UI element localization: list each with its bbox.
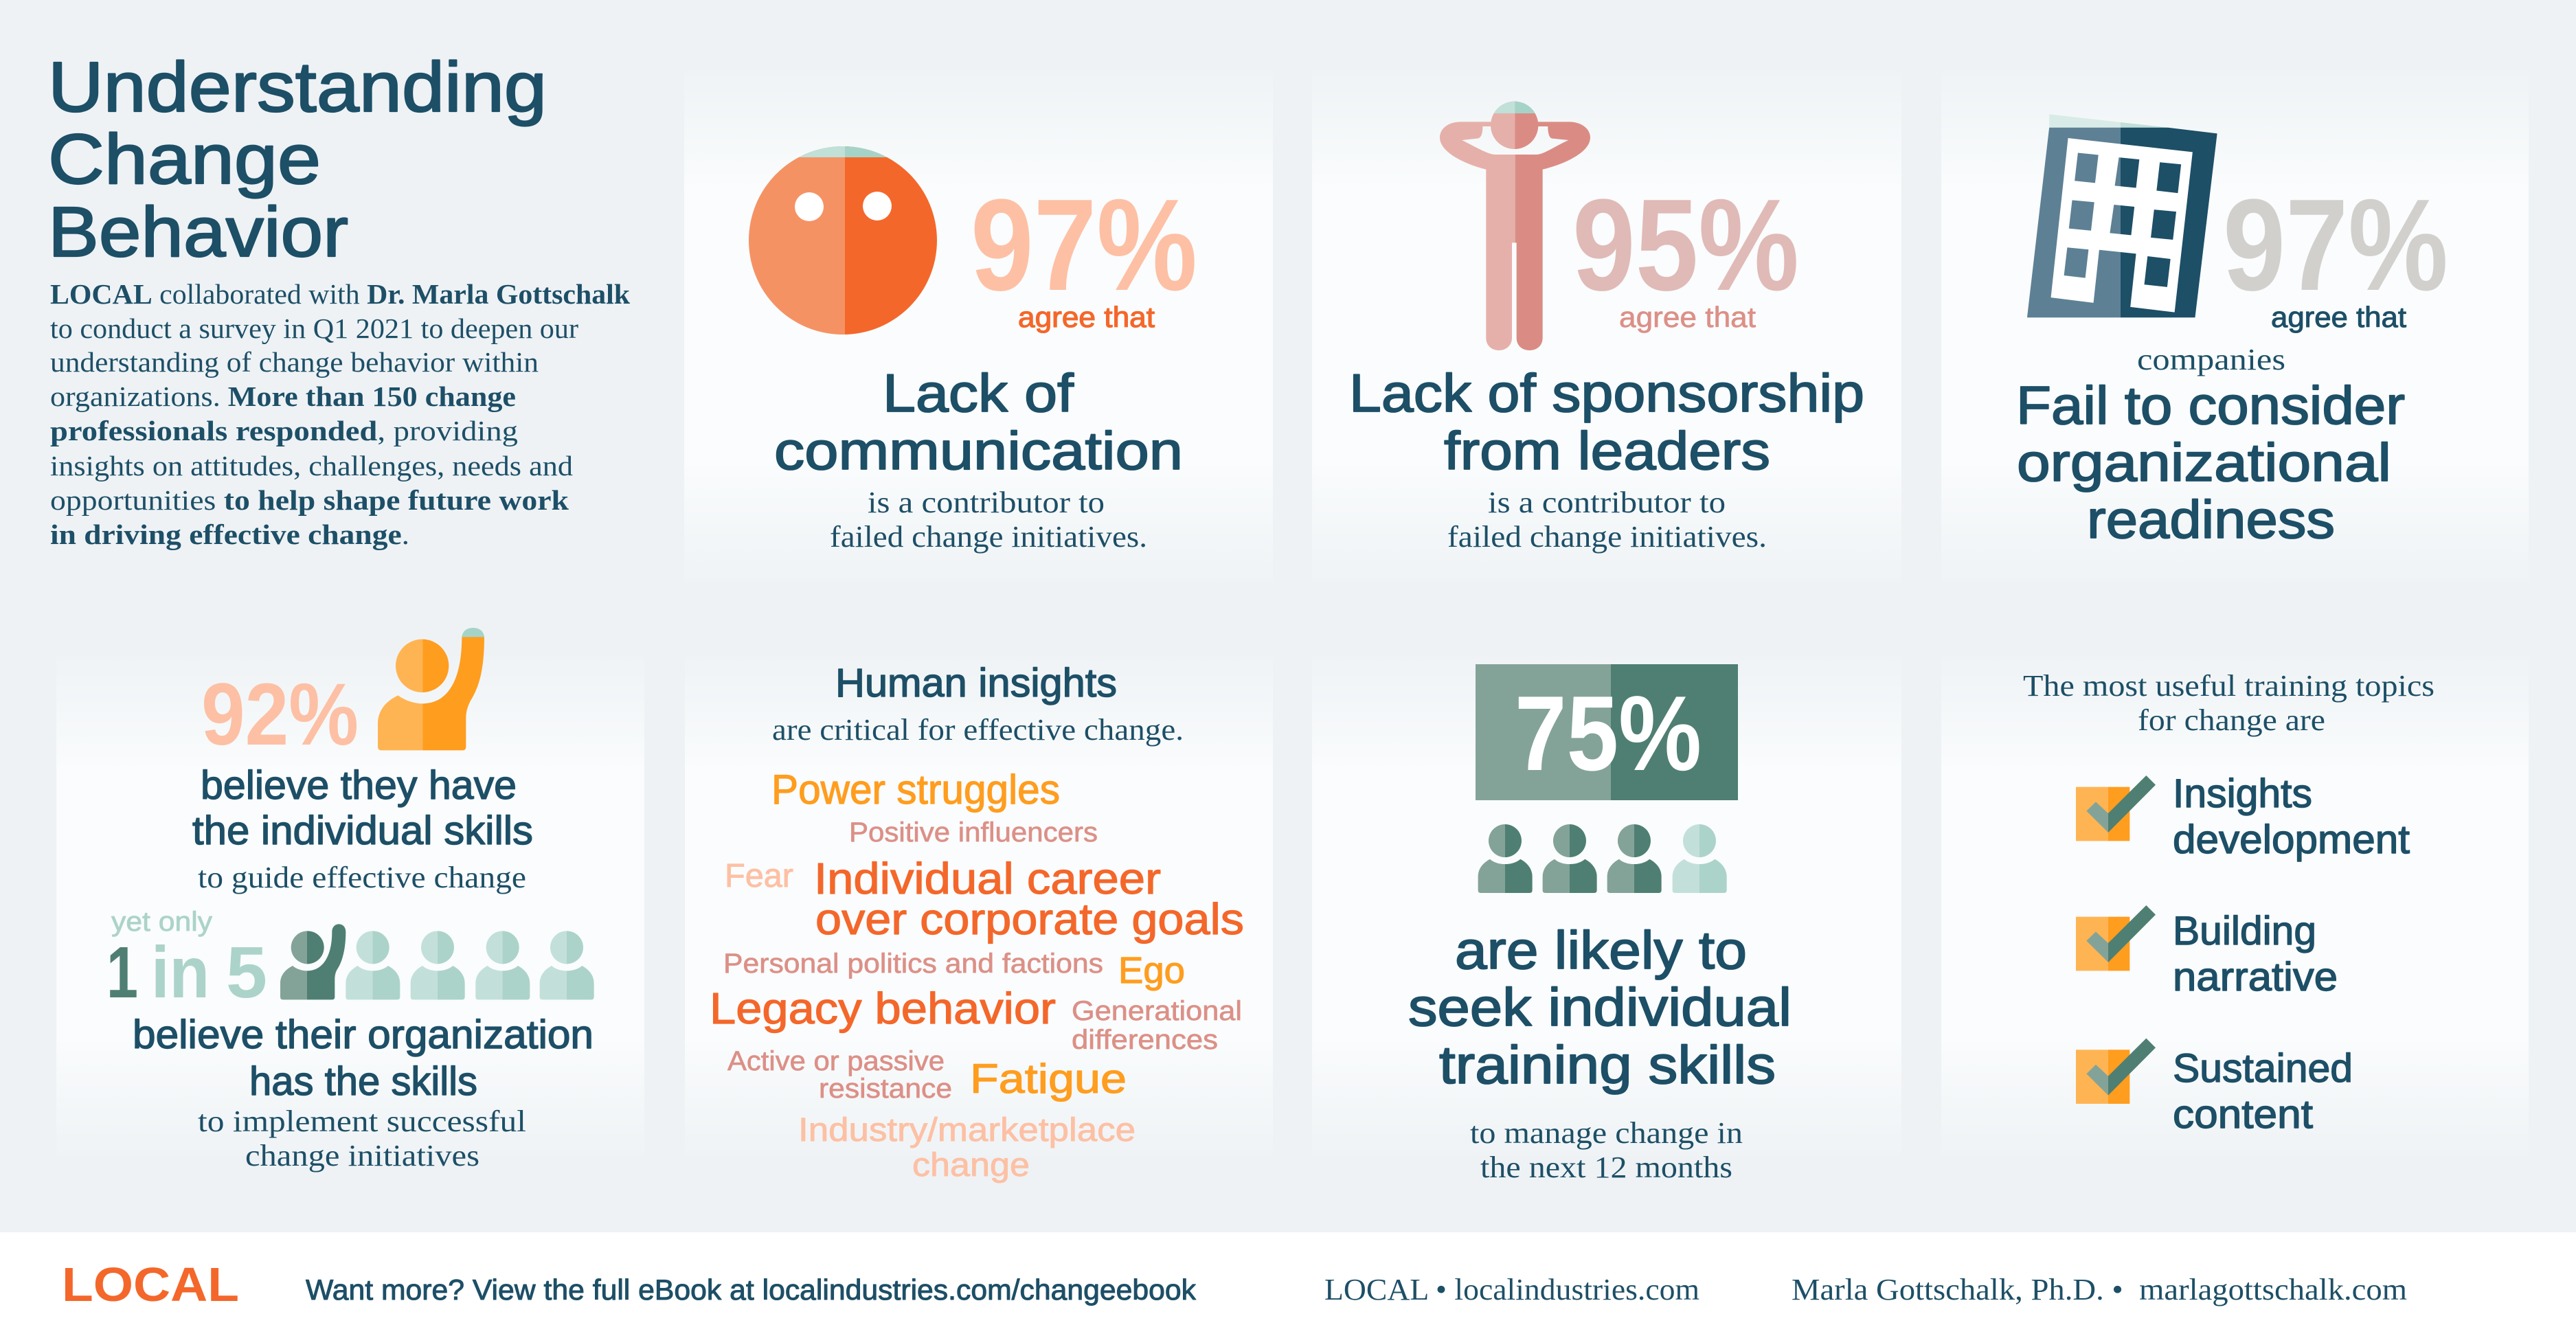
topic 2 bbox=[2173, 909, 2338, 999]
title: Behavior bbox=[48, 192, 348, 271]
icon: person with hands behind head bbox=[1440, 102, 1590, 350]
word cloud: Industry/marketplace bbox=[798, 1112, 1136, 1148]
icon: four people bbox=[1478, 824, 1727, 893]
stat: 95%: 95% bbox=[1572, 172, 1799, 318]
panel background bbox=[684, 71, 1273, 583]
topic 2: Building bbox=[2173, 909, 2316, 953]
panel: individual skills bbox=[56, 628, 644, 1173]
word cloud: Power struggles bbox=[771, 767, 1060, 813]
topic 3: Sustained bbox=[2173, 1046, 2353, 1091]
heading: Lack of sponsorship bbox=[1349, 363, 1864, 423]
intro text block: organizations. More than 150 change bbox=[50, 381, 516, 412]
word cloud: Fear bbox=[725, 858, 793, 894]
topic 1: development bbox=[2173, 817, 2410, 862]
title bbox=[48, 47, 547, 271]
caption bbox=[198, 1105, 526, 1173]
panel: lack of sponsorship bbox=[1312, 71, 1901, 583]
panel background bbox=[1941, 71, 2529, 583]
panel background bbox=[685, 656, 1273, 1156]
author link: Marla Gottschalk, Ph.D. • marlagottschalk.com bbox=[1792, 1273, 2407, 1306]
intro: for change are bbox=[2138, 703, 2325, 737]
panel: individual training bbox=[1312, 656, 1901, 1184]
word cloud: resistance bbox=[819, 1074, 952, 1104]
icon: person raising hand bbox=[378, 628, 484, 750]
stat: 1 in 5: 1 bbox=[106, 932, 138, 1013]
word cloud: Fatigue bbox=[970, 1056, 1127, 1102]
word cloud bbox=[710, 767, 1244, 1184]
caption: to implement successful bbox=[198, 1105, 526, 1138]
topic 1: Insights bbox=[2173, 771, 2312, 816]
heading: believe their organization: believe their organization bbox=[133, 1012, 594, 1057]
topic 3 bbox=[2173, 1046, 2353, 1137]
icon: face bbox=[749, 146, 937, 335]
intro text block: professionals responded , providing bbox=[50, 415, 518, 446]
companies: companies bbox=[2137, 343, 2285, 376]
intro bbox=[2023, 669, 2434, 737]
icon: checkbox 1 bbox=[2076, 775, 2156, 841]
title: Change bbox=[48, 120, 321, 199]
logo: LOCAL: LOCAL bbox=[62, 1258, 239, 1311]
caption: is a contributor to bbox=[868, 486, 1105, 519]
heading: believe they have: believe they have bbox=[201, 763, 517, 808]
caption: failed change initiatives. bbox=[1447, 520, 1767, 554]
word cloud: Legacy behavior bbox=[710, 984, 1056, 1033]
caption: the next 12 months bbox=[1480, 1151, 1732, 1184]
heading: training skills bbox=[1439, 1034, 1776, 1095]
intro: The most useful training topics bbox=[2023, 669, 2434, 703]
panel: lack of communication bbox=[684, 71, 1273, 583]
word cloud: change bbox=[912, 1147, 1030, 1184]
panel: organizational readiness bbox=[1941, 71, 2529, 583]
intro text block: insights on attitudes, challenges, needs and bbox=[50, 450, 573, 482]
caption bbox=[830, 486, 1147, 554]
heading bbox=[2016, 375, 2405, 550]
heading: Human insights bbox=[835, 661, 1117, 705]
caption: failed change initiatives. bbox=[830, 520, 1147, 554]
stat: 1 in 5: 5 bbox=[226, 932, 267, 1013]
word cloud: Ego bbox=[1118, 950, 1185, 991]
agree that: agree that bbox=[1619, 301, 1756, 333]
icon: checkbox 2 bbox=[2076, 905, 2156, 971]
word cloud: Individual career bbox=[814, 854, 1161, 903]
caption: to manage change in bbox=[1470, 1116, 1743, 1150]
stat box: 75%: 75% bbox=[1515, 674, 1702, 793]
panel background bbox=[56, 656, 644, 1156]
intro text block bbox=[50, 278, 630, 550]
caption: are critical for effective change. bbox=[772, 713, 1184, 747]
heading: Lack of bbox=[883, 363, 1074, 423]
heading bbox=[1408, 920, 1792, 1095]
stat: 1 in 5 bbox=[106, 932, 267, 1013]
icon: checkbox 3 bbox=[2076, 1039, 2156, 1104]
panel background bbox=[1312, 656, 1901, 1156]
panel: training topics bbox=[1941, 656, 2529, 1156]
heading: believe their organization: has the skills bbox=[249, 1059, 477, 1104]
intro text block: understanding of change behavior within bbox=[50, 346, 539, 378]
caption bbox=[1447, 486, 1767, 554]
caption: to guide effective change bbox=[198, 861, 526, 894]
stat: 97%: 97% bbox=[971, 172, 1197, 318]
icon: tilted building bbox=[2027, 114, 2217, 317]
caption: is a contributor to bbox=[1488, 486, 1726, 519]
heading: organizational bbox=[2017, 432, 2391, 492]
intro text block: to conduct a survey in Q1 2021 to deepen our bbox=[50, 313, 578, 344]
intro text block: in driving effective change . bbox=[50, 519, 409, 550]
heading bbox=[1349, 363, 1864, 481]
stat: 97%: 97% bbox=[2223, 172, 2448, 318]
word cloud: Positive influencers bbox=[849, 817, 1098, 848]
heading: communication bbox=[774, 420, 1183, 481]
footer bbox=[0, 1232, 2576, 1336]
local link: LOCAL • localindustries.com bbox=[1324, 1273, 1699, 1306]
panel background bbox=[1312, 71, 1901, 583]
topic 2: narrative bbox=[2173, 955, 2338, 999]
call to action: Want more? View the full eBook at localindustries.com/changeebook bbox=[306, 1273, 1197, 1306]
icon: row of five people bbox=[280, 924, 594, 999]
footer background bbox=[0, 1232, 2576, 1336]
word cloud: Active or passive bbox=[727, 1046, 945, 1076]
topic 3: content bbox=[2173, 1092, 2313, 1137]
caption: change initiatives bbox=[245, 1139, 479, 1173]
word cloud: over corporate goals bbox=[815, 894, 1244, 944]
heading: believe they have bbox=[192, 763, 533, 853]
stat: 1 in 5: in bbox=[151, 932, 210, 1013]
yet only: yet only bbox=[111, 907, 212, 937]
word cloud: Personal politics and factions bbox=[723, 949, 1103, 979]
heading bbox=[774, 363, 1183, 481]
title: Understanding bbox=[48, 47, 547, 126]
heading: from leaders bbox=[1444, 420, 1770, 481]
topic 1 bbox=[2173, 771, 2410, 862]
heading: readiness bbox=[2087, 489, 2335, 550]
heading: Fail to consider bbox=[2016, 375, 2405, 435]
caption bbox=[1470, 1116, 1743, 1184]
agree that: agree that bbox=[2271, 301, 2406, 333]
panel background bbox=[1941, 656, 2529, 1156]
heading: believe they have: the individual skills bbox=[192, 808, 533, 853]
heading: believe their organization bbox=[133, 1012, 594, 1104]
panel: human insights bbox=[685, 656, 1273, 1184]
intro text block: LOCAL collaborated with Dr. Marla Gottschalk bbox=[50, 278, 630, 310]
heading: seek individual bbox=[1408, 977, 1792, 1037]
heading: are likely to bbox=[1455, 920, 1747, 980]
stat: 92%: 92% bbox=[201, 666, 359, 764]
agree that: agree that bbox=[1018, 301, 1155, 333]
intro text block: opportunities to help shape future work bbox=[50, 484, 569, 516]
word cloud: Generational bbox=[1072, 996, 1242, 1026]
word cloud: differences bbox=[1072, 1025, 1218, 1055]
